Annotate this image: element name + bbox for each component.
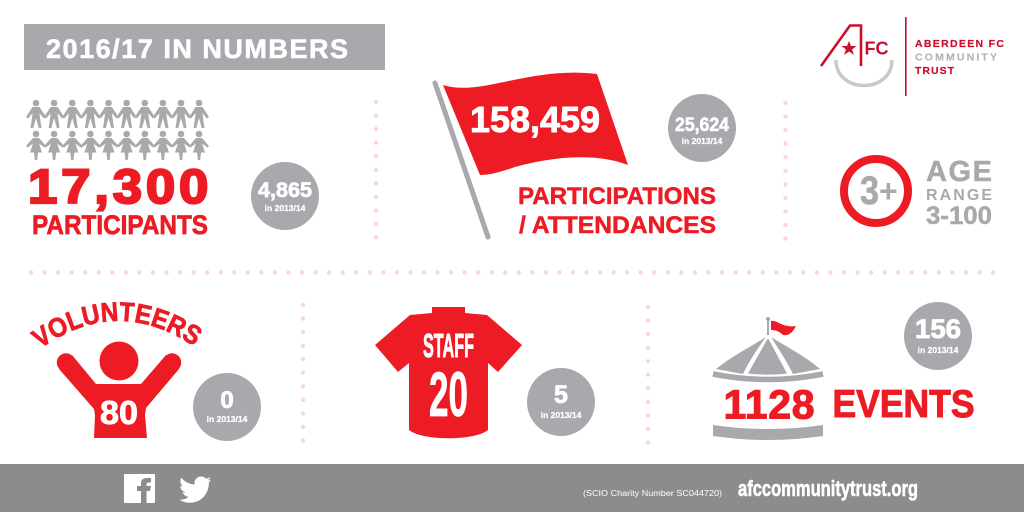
comparison badge: 156 — [904, 302, 972, 370]
footer bar — [0, 464, 1024, 512]
panel: staff — [375, 307, 522, 438]
panel: participants — [26, 100, 209, 240]
comparison badge: 156: 156 — [915, 314, 961, 344]
comparison badge: 4,865 — [251, 162, 319, 230]
title banner: 2016/17 IN NUMBERS — [46, 34, 348, 64]
stat: 158,459: 158,459 — [470, 99, 600, 140]
logo: Aberdeen FC Community Trust: ABERDEEN FC — [915, 38, 1004, 50]
icon: 3+ ring — [844, 159, 908, 223]
label: range: RANGE — [926, 187, 992, 204]
icon: red shirt — [375, 307, 522, 438]
comparison badge: 156: in 2013/14 — [918, 345, 959, 355]
label: participations / attendances: / ATTENDANCES — [519, 212, 716, 239]
label: events: EVENTS — [832, 383, 974, 426]
icon: volunteer with raised arms — [57, 342, 181, 438]
comparison badge: 0 — [193, 373, 261, 441]
title banner — [24, 24, 385, 70]
comparison badge: 5: in 2013/14 — [541, 410, 582, 420]
logo: Aberdeen FC Community Trust: FC — [864, 38, 888, 58]
charity number: (SCIO Charity Number SC044720) — [583, 489, 722, 498]
comparison badge: 5 — [527, 368, 595, 436]
stat: 17,300: 17,300 — [28, 159, 208, 213]
comparison badge: 25,624: in 2013/14 — [682, 136, 723, 146]
icon: twitter — [180, 476, 211, 503]
label: age: AGE — [926, 156, 992, 188]
label: participations / attendances: PARTICIPATIONS — [518, 183, 716, 210]
label: 3-100: 3-100 — [926, 202, 992, 230]
stat: 20: 20 — [429, 360, 468, 430]
comparison badge: 4,865: 4,865 — [258, 179, 312, 202]
comparison badge: 25,624 — [668, 94, 736, 162]
website address: afccommunitytrust.org — [738, 476, 918, 501]
comparison badge: 0: 0 — [220, 387, 234, 414]
logo: Aberdeen FC Community Trust — [821, 17, 1004, 96]
panel: events — [713, 317, 974, 440]
panel: volunteers — [29, 302, 202, 438]
icon: 3+ ring: 3 — [860, 169, 879, 213]
label: participants: PARTICIPANTS — [32, 210, 208, 240]
icon: circus tent — [713, 317, 823, 440]
icon: flag pole — [435, 83, 488, 237]
logo: Aberdeen FC Community Trust: COMMUNITY — [915, 52, 997, 64]
icon: facebook — [124, 474, 155, 503]
stat: 1128: 1128 — [724, 382, 814, 428]
icon: 3+ ring: + — [879, 173, 898, 209]
logo: Aberdeen FC Community Trust: TRUST — [915, 65, 955, 77]
panel: staff: STAFF — [423, 327, 474, 364]
stat: 80: 80 — [100, 394, 138, 431]
comparison badge: 5: 5 — [554, 381, 568, 409]
heading: curved volunteers text: VOLUNTEERS — [29, 302, 202, 346]
comparison badge: 4,865: in 2013/14 — [265, 203, 306, 213]
icon: row of female figures — [26, 131, 209, 160]
label: participations / attendances — [518, 183, 716, 239]
comparison badge: 0: in 2013/14 — [207, 414, 248, 424]
icon: red flag — [443, 73, 628, 175]
panel: age range — [844, 156, 992, 230]
panel: participations flag — [435, 73, 716, 239]
comparison badge: 25,624: 25,624 — [675, 115, 729, 136]
icon: row of male figures — [26, 100, 209, 128]
